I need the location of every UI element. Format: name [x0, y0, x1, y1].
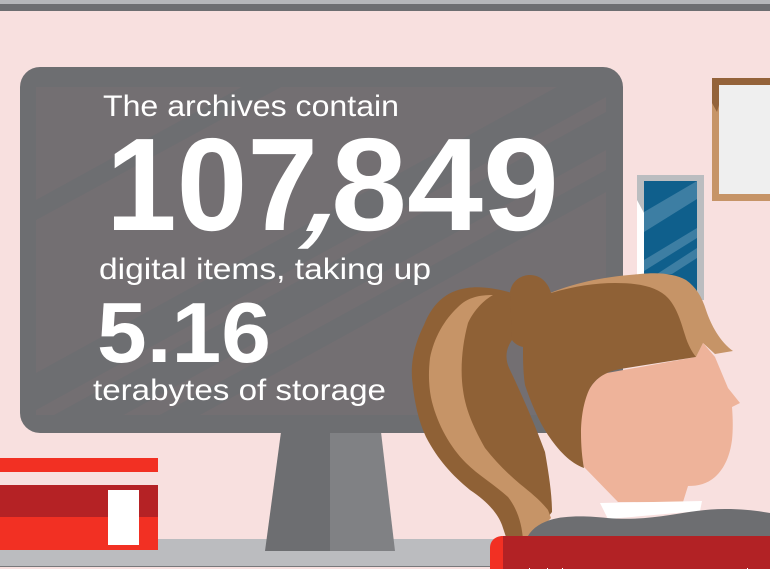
desk	[0, 539, 500, 567]
neck and face	[580, 343, 740, 502]
text: the archives contain: The archives contain	[103, 90, 399, 123]
monitor	[20, 67, 623, 433]
red chair back	[490, 536, 770, 569]
text: terabytes of storage: terabytes of storage	[93, 374, 386, 407]
monitor stand	[265, 432, 395, 551]
wall picture frame	[712, 78, 770, 201]
big number: 107,849: ,	[286, 127, 379, 256]
hair: main and bun	[510, 275, 696, 468]
ponytail	[412, 287, 552, 540]
shirt collar	[600, 501, 702, 519]
hair: light highlight	[550, 273, 733, 357]
big number: 107,849: 107	[106, 111, 318, 258]
text: digital items, taking up: digital items, taking up	[99, 253, 431, 286]
big number: 107,849: 849	[331, 111, 559, 258]
top ceiling bar	[0, 0, 770, 11]
person with ponytail	[412, 273, 770, 540]
big number: 5.16: 5.16	[97, 286, 271, 381]
shoulders	[526, 509, 770, 540]
stack of red books	[0, 458, 158, 550]
window	[637, 175, 704, 300]
big number: 107,849	[106, 111, 559, 258]
